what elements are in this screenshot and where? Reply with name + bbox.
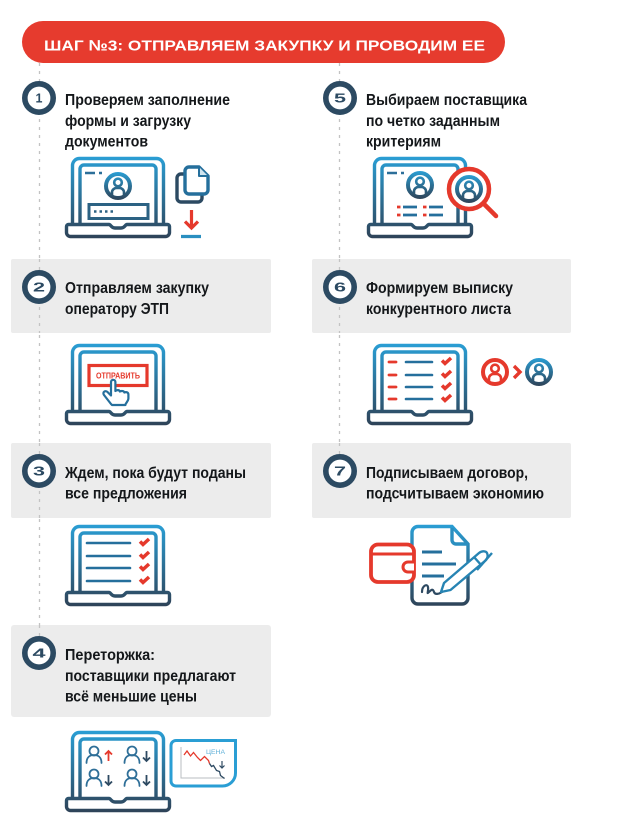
step 4 text: поставщики предлагают xyxy=(65,668,236,685)
step 1 text: Проверяем заполнение xyxy=(65,92,230,109)
icon: laptop with ranked list xyxy=(368,346,472,424)
number badge 5 xyxy=(326,84,354,112)
step 1 xyxy=(25,84,230,236)
title banner xyxy=(22,21,505,63)
step 3 text: Ждем, пока будут поданы xyxy=(64,465,246,482)
dotted connector over panel xyxy=(338,443,340,462)
number badge 2 xyxy=(25,273,53,301)
title banner: ШАГ №3: ОТПРАВЛЯЕМ ЗАКУПКУ И ПРОВОДИМ ЕЕ xyxy=(44,38,485,54)
icon: laptop with bidders xyxy=(66,732,170,810)
step 5 text: критериям xyxy=(366,134,441,150)
panel: step 7 xyxy=(312,443,571,518)
icon: download arrow xyxy=(181,210,201,236)
panel: step 3 xyxy=(11,443,271,518)
number badge 3: 3 xyxy=(33,464,45,478)
step 4 xyxy=(11,625,271,810)
panel: step 4 xyxy=(11,625,271,717)
dotted connector over panel xyxy=(338,259,340,333)
step 6 text: конкурентного листа xyxy=(366,301,511,318)
step 4 text xyxy=(65,647,236,706)
dotted connector over panel xyxy=(38,259,40,333)
number badge 4: 4 xyxy=(32,646,46,660)
icon: signed contract xyxy=(412,526,468,604)
icon: pen xyxy=(441,551,492,592)
icon: documents xyxy=(177,167,208,202)
step 5 text: Выбираем поставщика xyxy=(366,92,527,109)
step 4 text: всё меньшие цены xyxy=(65,688,197,706)
dotted timeline: right column xyxy=(338,63,340,462)
number badge 4 xyxy=(25,639,53,667)
icon: magnifier with supplier xyxy=(449,169,496,216)
step 5 text xyxy=(366,92,527,150)
icon: laptop with login form xyxy=(66,158,170,236)
panel: step 6 xyxy=(312,259,571,333)
icon: laptop with send button xyxy=(66,346,170,424)
number badge 6: 6 xyxy=(334,280,346,294)
number badge 6 xyxy=(326,273,354,301)
step 3 text xyxy=(64,465,246,502)
icon: laptop with supplier profile xyxy=(368,158,472,236)
step 5 xyxy=(326,84,527,236)
step 2 text xyxy=(65,280,209,318)
step 1 text: документов xyxy=(65,134,148,150)
step 6 text xyxy=(366,280,513,318)
dotted connector over panel xyxy=(38,443,40,518)
step 2 xyxy=(11,259,271,424)
icon: laptop with send button: ОТПРАВИТЬ xyxy=(96,370,140,380)
panel: step 2 xyxy=(11,259,271,333)
step 7 text: подсчитываем экономию xyxy=(366,486,544,502)
dotted connector over panel xyxy=(38,625,40,640)
step 2 text: оператору ЭТП xyxy=(65,301,169,318)
step 1 text: формы и загрузку xyxy=(65,113,191,130)
number badge 1: 1 xyxy=(36,92,43,106)
step 7 xyxy=(312,443,571,604)
number badge 1 xyxy=(25,84,53,112)
icon: wallet xyxy=(371,544,414,582)
step 6 xyxy=(312,259,571,424)
icon: laptop with checklist xyxy=(66,526,170,604)
step 3 xyxy=(11,443,271,604)
step 1 text xyxy=(65,92,230,150)
number badge 2: 2 xyxy=(33,280,45,294)
step 3 text: все предложения xyxy=(65,486,187,502)
chart: falling price: ЦЕНА xyxy=(206,749,226,756)
number badge 3 xyxy=(25,457,53,485)
step 7 text xyxy=(366,465,544,502)
number badge 7: 7 xyxy=(334,464,346,478)
step 4 text: Переторжка: xyxy=(65,647,155,664)
chart: falling price xyxy=(171,740,236,786)
number badge 7 xyxy=(326,457,354,485)
step 2 text: Отправляем закупку xyxy=(65,280,209,297)
number badge 5: 5 xyxy=(334,92,346,106)
step 6 text: Формируем выписку xyxy=(366,280,513,297)
icon: supplier comparison xyxy=(483,360,551,384)
step 5 text: по четко заданным xyxy=(366,113,500,130)
step 7 text: Подписываем договор, xyxy=(366,465,528,482)
dotted timeline: left column xyxy=(38,63,40,640)
